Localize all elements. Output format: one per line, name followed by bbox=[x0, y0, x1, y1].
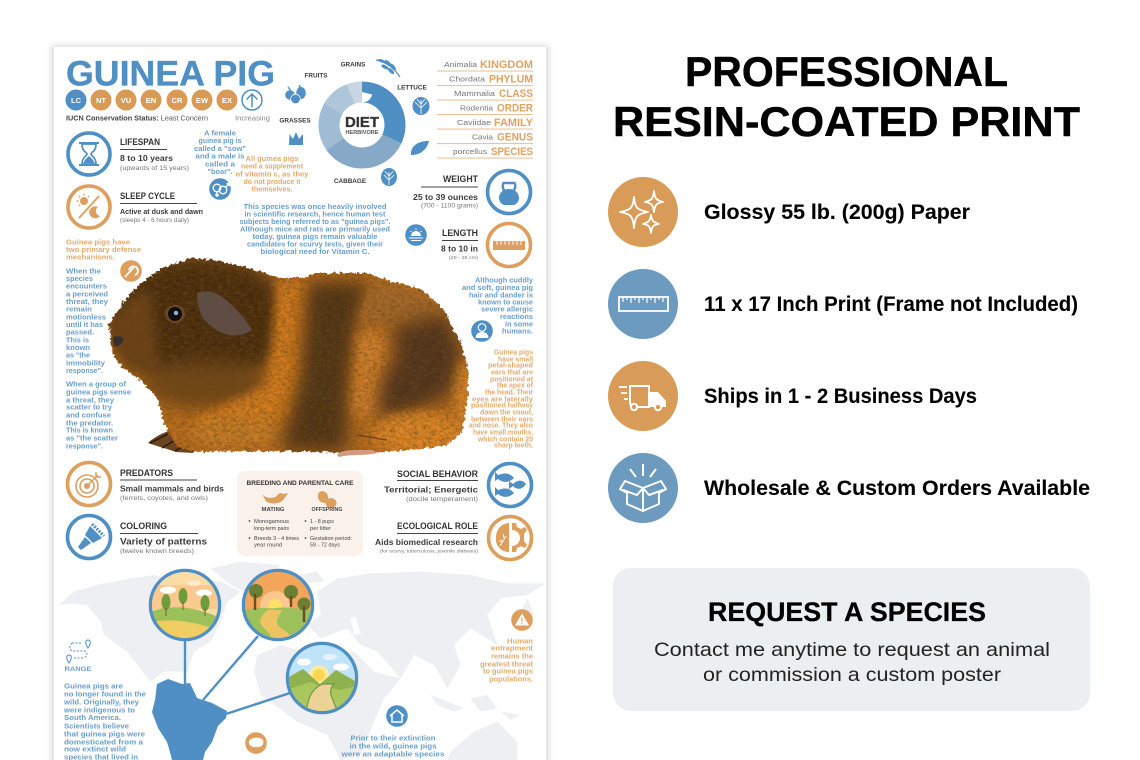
conservation status badges: EN bbox=[146, 96, 156, 105]
icon: lifespan hourglass bbox=[68, 133, 110, 175]
taxonomy table bbox=[437, 59, 534, 159]
taxonomy table: Cavia bbox=[472, 132, 494, 142]
taxonomy table: Animalia bbox=[444, 60, 478, 69]
diet category labels: CABBAGE bbox=[334, 178, 367, 185]
offspring column: per litter bbox=[310, 526, 331, 532]
taxonomy table: Caviidae bbox=[457, 118, 491, 127]
text: immobility response: This is bbox=[66, 336, 89, 344]
icon: leaf bbox=[411, 141, 429, 155]
mating column bbox=[249, 507, 300, 548]
text: anatomy description: have small mouths, bbox=[473, 430, 533, 436]
text: range description: Guinea pigs are bbox=[64, 682, 123, 690]
length text bbox=[441, 228, 478, 261]
weight text: WEIGHT bbox=[443, 174, 478, 184]
sleep cycle text: (sleeps 4 - 6 hours daily) bbox=[120, 218, 189, 224]
taxonomy table: Chordata bbox=[449, 74, 486, 84]
panel: request a species bbox=[613, 568, 1090, 711]
icon: predators target bbox=[68, 462, 110, 506]
text: range description: that guinea pigs were bbox=[64, 730, 145, 738]
ecological role text: (for scurvy, tuberculosis, juvenile diabetes) bbox=[380, 548, 479, 554]
weight text bbox=[413, 174, 478, 210]
ecological role text: ECOLOGICAL ROLE bbox=[397, 521, 478, 531]
dark rear patch bbox=[377, 312, 463, 418]
icon: defense bbox=[120, 260, 142, 282]
diet category labels: GRASSES bbox=[279, 118, 311, 124]
population trend arrow bbox=[242, 90, 262, 110]
head and shoulder fur bbox=[108, 254, 292, 386]
text: anatomy description: positioned halfway bbox=[471, 402, 533, 410]
text: immobility response: remain bbox=[66, 304, 92, 314]
orange shoulder stripe bbox=[196, 276, 310, 425]
text: scatter response: guinea pigs sense bbox=[66, 388, 131, 396]
conservation status badges: CR bbox=[172, 96, 183, 105]
lifespan text: (upwards of 15 years) bbox=[120, 165, 189, 172]
text: scatter response: response". bbox=[66, 442, 103, 450]
text: scatter response: as "the scatter bbox=[66, 434, 118, 442]
text: threat note bbox=[480, 636, 533, 684]
text: allergy note: severe allergic bbox=[481, 304, 533, 314]
heading: professional resin-coated print: PROFESSIONAL bbox=[685, 48, 1008, 95]
predators text: Small mammals and birds bbox=[120, 484, 224, 494]
habitat scene: forest sunset bbox=[243, 570, 313, 640]
panel: breeding and parental care: BREEDING AND PARENTAL CARE bbox=[246, 480, 354, 487]
text: vitamin c note: of vitamin c, as they bbox=[236, 170, 309, 178]
text: anatomy description: down the snout, bbox=[480, 410, 533, 416]
orange flank bbox=[352, 330, 390, 415]
feature: size: 11 x 17 Inch Print (Frame not Included) bbox=[704, 293, 1078, 316]
icon: ruler bbox=[608, 269, 678, 339]
lifespan text bbox=[120, 137, 189, 172]
text: range description: wild. Originally, they bbox=[63, 698, 140, 706]
weight text: (700 - 1100 grams) bbox=[421, 204, 478, 210]
text: scatter response: This is known bbox=[66, 426, 113, 434]
text: immobility response: known bbox=[66, 343, 90, 352]
icon: sleep cycle bbox=[68, 186, 110, 228]
icon: lettuce bbox=[412, 97, 430, 115]
icon: open box bbox=[608, 453, 678, 523]
text: scatter response: and confuse bbox=[66, 410, 111, 420]
icon: warning bbox=[511, 609, 533, 631]
offspring column: Gestation period: bbox=[310, 536, 352, 542]
taxonomy table: porcellus bbox=[453, 147, 487, 156]
text: allergy note: known to cause bbox=[478, 298, 533, 306]
diet category labels: GRAINS bbox=[341, 62, 366, 68]
mating column: Monogamous bbox=[254, 519, 290, 525]
map: south america range bbox=[152, 679, 227, 760]
text: defense mechanisms intro: mechanisms. bbox=[66, 252, 115, 262]
text: immobility response: passed. bbox=[66, 328, 94, 336]
text: range description: no longer found in the bbox=[64, 690, 146, 698]
icon: coloring paintbrush bbox=[68, 516, 110, 558]
icon: grains bbox=[376, 58, 400, 77]
icon: allergic person bbox=[471, 320, 493, 342]
text: vitamin c note: themselves. bbox=[252, 184, 292, 194]
panel: request a species: REQUEST A SPECIES bbox=[708, 597, 986, 627]
icon: ecological role gear and leaf bbox=[488, 516, 532, 560]
text: habitat note bbox=[340, 734, 444, 758]
text: female and male names bbox=[194, 128, 246, 176]
predators text: PREDATORS bbox=[120, 468, 173, 478]
taxonomy table: Mammalia bbox=[454, 89, 496, 98]
heading: professional resin-coated print: RESIN-COATED PRINT bbox=[613, 98, 1080, 145]
text: anatomy description: have small bbox=[498, 356, 533, 364]
nose bbox=[113, 336, 124, 346]
text: allergy note: in some bbox=[505, 320, 533, 328]
text: immobility response: as "the bbox=[66, 350, 90, 360]
coloring text: Variety of patterns bbox=[120, 536, 207, 546]
conservation status badges: VU bbox=[121, 96, 132, 105]
text: immobility response: When the bbox=[66, 266, 101, 276]
text: allergy note: and soft, guinea pig bbox=[462, 283, 533, 292]
conservation status badges bbox=[66, 90, 238, 110]
mating column: MATING bbox=[262, 507, 285, 513]
coloring text: (twelve known breeds) bbox=[120, 548, 194, 555]
offspring column: 1 - 8 pups bbox=[310, 519, 335, 525]
habitat scene: grassland trees bbox=[150, 570, 220, 640]
conservation status badges: EW bbox=[196, 96, 209, 105]
panel: request a species: Contact me anytime to request an animal bbox=[654, 639, 1050, 661]
text: allergy note: hair and dander is bbox=[469, 290, 533, 300]
icon: grasses bbox=[289, 132, 303, 145]
text: anatomy description: eyes are laterally bbox=[472, 396, 533, 404]
coloring text: COLORING bbox=[120, 521, 167, 531]
icon: delivery truck bbox=[608, 361, 678, 431]
text: range description: Scientists believe bbox=[64, 722, 129, 730]
diet label: HERBIVORE bbox=[346, 130, 379, 136]
sleep cycle text: SLEEP CYCLE bbox=[120, 191, 175, 201]
text: allergy note: reactions bbox=[500, 312, 533, 321]
text: defense mechanisms intro bbox=[66, 238, 141, 262]
text: range description: South America. bbox=[64, 713, 121, 722]
text: threat note: greatest threat bbox=[480, 660, 533, 668]
dark mid stripe bbox=[280, 282, 370, 452]
icon: gender symbols bbox=[209, 178, 231, 200]
text: defense mechanisms intro: two primary defense bbox=[66, 245, 141, 254]
text: scientific research note bbox=[240, 202, 390, 256]
text: female and male names: called a "sow" bbox=[194, 144, 246, 153]
text: immobility response: encounters bbox=[66, 282, 107, 290]
text: female and male names: "boar". bbox=[208, 167, 232, 176]
taxonomy table: GENUS bbox=[497, 132, 533, 144]
social behavior text: Territorial; Energetic bbox=[384, 484, 478, 494]
lifespan text: LIFESPAN bbox=[120, 137, 160, 147]
upper rear fur bbox=[358, 280, 440, 325]
text: vitamin c note bbox=[236, 154, 309, 194]
icon: fruits bbox=[285, 85, 306, 104]
text: immobility response: threat, they bbox=[66, 297, 109, 306]
text: allergy note bbox=[462, 276, 534, 336]
weight text: 25 to 39 ounces bbox=[413, 192, 478, 202]
conservation status badges: LC bbox=[71, 96, 82, 105]
social behavior text: (docile temperament) bbox=[406, 496, 478, 503]
icon: sparkles bbox=[608, 177, 678, 247]
text: threat note: entrapment bbox=[491, 644, 533, 652]
title: GUINEA PIG bbox=[66, 54, 275, 94]
feature: shipping: Ships in 1 - 2 Business Days bbox=[704, 385, 977, 408]
text: scientific research note: today, guinea pigs remain valuable bbox=[252, 232, 378, 241]
text: immobility response bbox=[66, 266, 109, 375]
taxonomy table: PHYLUM bbox=[489, 74, 533, 86]
diet category labels: LETTUCE bbox=[397, 84, 427, 92]
text: female and male names: and a male is bbox=[196, 152, 244, 160]
text: vitamin c note: need a supplement bbox=[241, 162, 303, 170]
mating column: year round bbox=[254, 542, 282, 548]
ear bbox=[197, 291, 252, 335]
text: anatomy description: between their ears bbox=[471, 416, 533, 424]
text: immobility response: motionless bbox=[66, 312, 106, 322]
diet label: DIET bbox=[345, 114, 379, 131]
text: scatter response bbox=[66, 380, 131, 450]
text: threat note: remains the bbox=[491, 652, 533, 660]
text: allergy note: Although cuddly bbox=[475, 276, 534, 284]
text: scatter response: the predator. bbox=[66, 418, 113, 428]
conservation status badges: NT bbox=[96, 96, 106, 105]
connector lines to south america bbox=[185, 636, 290, 714]
population trend label: Increasing bbox=[235, 116, 270, 122]
text: habitat note: Prior to their extinction bbox=[350, 734, 436, 742]
text: female and male names: A female bbox=[204, 128, 236, 138]
length text: LENGTH bbox=[442, 228, 478, 238]
diet category labels: FRUITS bbox=[304, 72, 328, 80]
text: scientific research note: This species was once heavily involved bbox=[244, 202, 387, 211]
text: anatomy description: Guinea pigs bbox=[494, 350, 533, 356]
text: habitat note: in the wild, guinea pigs bbox=[350, 742, 436, 750]
text: scatter response: scatter to try bbox=[66, 402, 113, 412]
taxonomy table: SPECIES bbox=[491, 146, 533, 158]
eye bbox=[165, 305, 185, 323]
text: anatomy description: positioned at bbox=[490, 376, 534, 384]
length text: (29 - 25 cm) bbox=[449, 255, 478, 261]
text: range description bbox=[63, 682, 146, 760]
taxonomy table: CLASS bbox=[499, 88, 533, 100]
text: female and male names: called a bbox=[205, 160, 236, 168]
text: anatomy description: and nose. They also bbox=[469, 422, 533, 430]
text: defense mechanisms intro: Guinea pigs have bbox=[66, 238, 130, 246]
paws bbox=[148, 428, 200, 453]
text: allergy note: humans. bbox=[502, 326, 533, 336]
text: female and male names: guinea pig is bbox=[198, 136, 242, 145]
text: immobility response: until it has bbox=[66, 320, 103, 329]
text: range description: were indigenous to bbox=[63, 706, 135, 714]
text: habitat note: were an adaptable species bbox=[340, 750, 444, 758]
feature: paper: Glossy 55 lb. (200g) Paper bbox=[704, 201, 970, 224]
text: immobility response: a perceived bbox=[66, 290, 108, 298]
offspring column bbox=[305, 507, 352, 548]
guinea pig illustration bbox=[100, 250, 480, 460]
habitat scene: mountain road bbox=[287, 643, 357, 713]
text: immobility response: response". bbox=[66, 366, 103, 375]
hind foot bbox=[337, 450, 378, 457]
predators text: (ferrets, coyotes, and owls) bbox=[120, 495, 208, 502]
diet category labels bbox=[279, 62, 427, 185]
lifespan text: 8 to 10 years bbox=[120, 153, 173, 163]
conservation status text: IUCN Conservation Status: Least Concern bbox=[66, 114, 208, 122]
ecological role text: Aids biomedical research bbox=[375, 537, 478, 547]
taxonomy table: Rodentia bbox=[460, 104, 494, 112]
poster sheet bbox=[51, 45, 549, 760]
text: anatomy description: sharp teeth. bbox=[494, 442, 533, 450]
offspring column: 59 - 72 days bbox=[310, 542, 341, 548]
social behavior text bbox=[384, 469, 478, 503]
sleep cycle text: Active at dusk and dawn bbox=[120, 209, 203, 216]
mating column: Breeds 3 - 4 times bbox=[254, 536, 300, 542]
text: anatomy description: the apex of bbox=[497, 382, 534, 390]
text: threat note: to guinea pigs bbox=[483, 666, 533, 676]
text: anatomy description: the head. Their bbox=[485, 390, 533, 396]
coloring text bbox=[120, 521, 207, 555]
icon: food storage bbox=[245, 732, 267, 754]
text: scientific research note: candidates for scurvy tests, given their bbox=[247, 240, 383, 248]
panel: breeding and parental care bbox=[237, 471, 363, 556]
world map background bbox=[59, 562, 546, 760]
text: immobility response: immobility bbox=[66, 358, 106, 368]
feature: wholesale: Wholesale & Custom Orders Available bbox=[704, 477, 1090, 500]
text: anatomy description: petal-shaped bbox=[488, 362, 533, 370]
text: scientific research note: Although mice and rats are primarily used bbox=[240, 224, 390, 234]
range label: RANGE bbox=[64, 666, 92, 673]
conservation status badges: EX bbox=[222, 96, 232, 105]
text: scientific research note: subjects being referred to as "guinea pigs". bbox=[240, 217, 390, 226]
text: vitamin c note: All guinea pigs bbox=[246, 154, 298, 163]
text: range description: domesticated from a bbox=[64, 738, 144, 746]
icon: mating storks bbox=[262, 493, 288, 503]
text: range description: now extinct wild bbox=[64, 744, 126, 754]
text: scientific research note: biological need for Vitamin C. bbox=[260, 247, 370, 256]
text: anatomy description: which contain 20 bbox=[477, 436, 533, 444]
taxonomy table: KINGDOM bbox=[480, 59, 533, 71]
social behavior text: SOCIAL BEHAVIOR bbox=[397, 469, 478, 479]
text: vitamin c note: do not produce it bbox=[244, 177, 301, 186]
diet donut chart bbox=[329, 92, 395, 158]
icon: sunset bbox=[405, 224, 427, 246]
icon: home habitat bbox=[386, 705, 408, 727]
icon: length ruler bbox=[488, 224, 530, 266]
text: scatter response: a threat, they bbox=[66, 396, 115, 404]
text: scientific research note: in scientific research, hence human test bbox=[244, 210, 386, 218]
icon: weight kettlebell bbox=[488, 170, 530, 214]
icon: cabbage bbox=[381, 168, 397, 186]
icon: social behavior fish bbox=[488, 464, 532, 506]
text: immobility response: species bbox=[66, 274, 93, 283]
mating column: long-term pairs bbox=[254, 526, 290, 532]
ecological role text bbox=[375, 521, 479, 554]
icon: range routes bbox=[67, 640, 90, 663]
heading: professional resin-coated print bbox=[613, 48, 1080, 145]
icon: offspring bbox=[316, 489, 336, 508]
length text: 8 to 10 in bbox=[441, 244, 478, 254]
text: threat note: populations. bbox=[489, 674, 533, 684]
taxonomy table: FAMILY bbox=[494, 117, 534, 129]
orange haunch bbox=[374, 412, 466, 456]
offspring column: OFFSPRING bbox=[312, 507, 343, 513]
panel: request a species: or commission a custom poster bbox=[703, 664, 1002, 686]
text: threat note: Human bbox=[507, 636, 533, 646]
sleep cycle text bbox=[120, 191, 203, 224]
text: anatomy description bbox=[469, 350, 534, 450]
predators text bbox=[120, 468, 224, 502]
text: anatomy description: ears that are bbox=[491, 370, 533, 376]
text: scatter response: When a group of bbox=[66, 380, 126, 388]
taxonomy table: ORDER bbox=[497, 102, 533, 114]
